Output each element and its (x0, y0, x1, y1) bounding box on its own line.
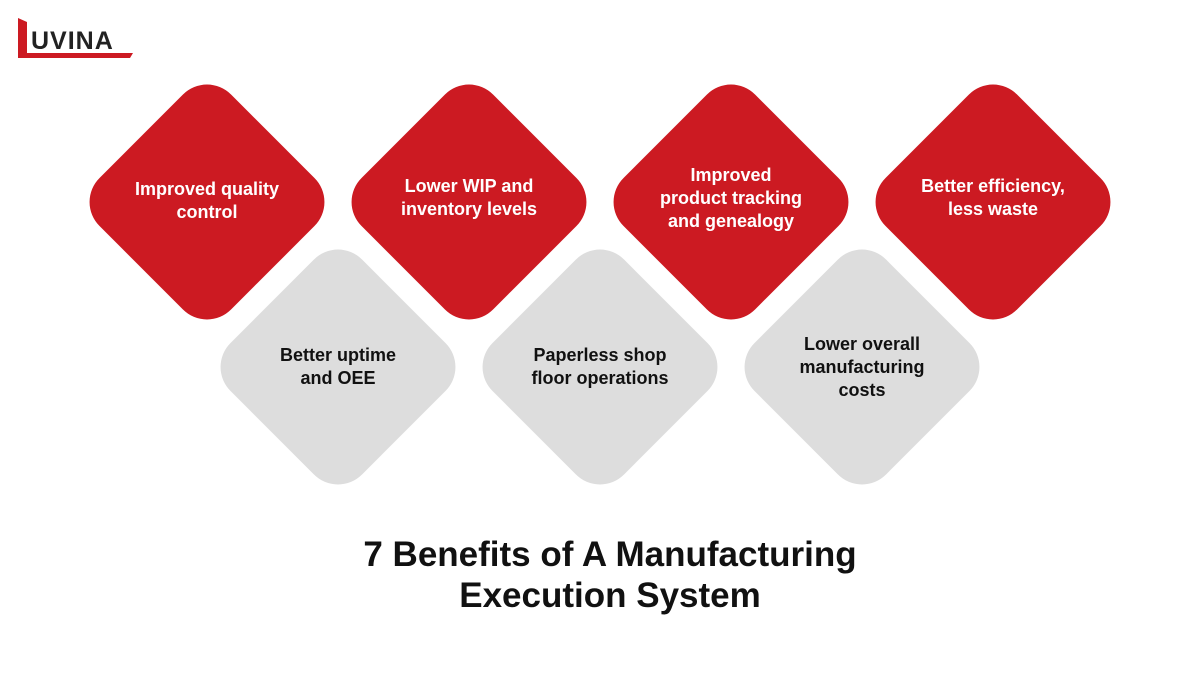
logo: UVINA (31, 27, 114, 55)
title: Execution System (459, 576, 761, 615)
diamond 1 (75, 70, 339, 334)
text 3: product tracking (660, 188, 802, 208)
diamond 4 (861, 70, 1125, 334)
text 7: Lower overall manufacturing costs (799, 334, 924, 400)
text 5: Better uptime and OEE (280, 345, 396, 388)
title: 7 Benefits of A Manufacturing (363, 535, 857, 574)
text 3: Improved (690, 165, 772, 185)
diamond 6 (468, 235, 732, 499)
logo (18, 18, 133, 58)
text 4: Better efficiency, less waste (921, 176, 1065, 219)
text 3: and genealogy (668, 211, 794, 231)
text 2: Lower WIP and inventory levels (401, 176, 537, 219)
text 3 (660, 165, 802, 231)
text 1: Improved quality control (135, 179, 279, 222)
diamond 5 (206, 235, 470, 499)
title (363, 535, 857, 615)
diamond 7 (730, 235, 994, 499)
diamond 2 (337, 70, 601, 334)
text 6: Paperless shop floor operations (531, 345, 668, 388)
diamond 3 (599, 70, 863, 334)
